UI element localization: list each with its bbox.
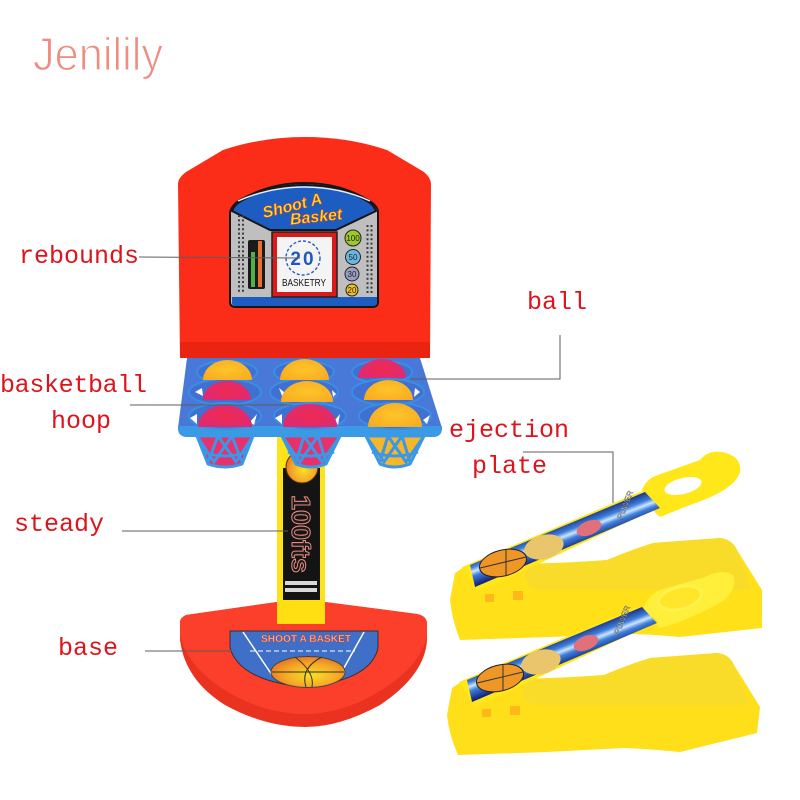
base court print [230,631,378,688]
launcher top [450,452,762,640]
score display: 20 [290,249,316,270]
label: ball: ball [527,288,587,317]
score badges: 50 [349,253,358,262]
score badges: 100 [346,234,360,243]
speaker dots [239,215,372,293]
hoop holes [189,361,431,429]
leader line: steady [122,530,288,532]
label: basketball hoop: basketball [0,371,147,400]
leader line: ejection plate [523,452,613,503]
label: steady: steady [14,510,104,539]
score badges: 20 [348,286,357,295]
leader line: basketball hoop [130,404,292,406]
scoreboard panel: Basket [289,206,344,229]
score meter [248,240,265,289]
leader line: rebounds [139,257,300,258]
basketball tray [178,358,442,437]
scoreboard title: Shoot A [261,191,324,222]
label: basketball hoop: hoop [51,407,111,436]
score display [272,232,337,297]
score badges [345,230,361,296]
pole [277,437,325,624]
launcher print: POWER [613,604,632,636]
score badges: 30 [348,270,357,279]
launcher print [470,489,660,587]
hole slits [190,388,430,425]
label: base: base [58,634,118,663]
label: rebounds: rebounds [19,242,139,271]
leader line: base [145,650,232,652]
score display: BASKETRY [282,277,326,289]
label: ejection plate: ejection [449,416,569,445]
balls [198,359,422,427]
launcher bottom [447,572,760,755]
backboard [178,137,431,358]
leader line: ball [410,335,560,379]
pole logo: 100fts [286,495,316,573]
launcher print: POWER [616,489,635,521]
label: ejection plate: plate [472,452,547,481]
scoreboard panel [230,183,378,307]
base print text: SHOOT A BASKET [261,634,351,645]
hoop nets [197,436,424,467]
base [180,600,427,727]
launcher print [467,604,657,702]
brand logo: Jenilily [33,28,163,80]
